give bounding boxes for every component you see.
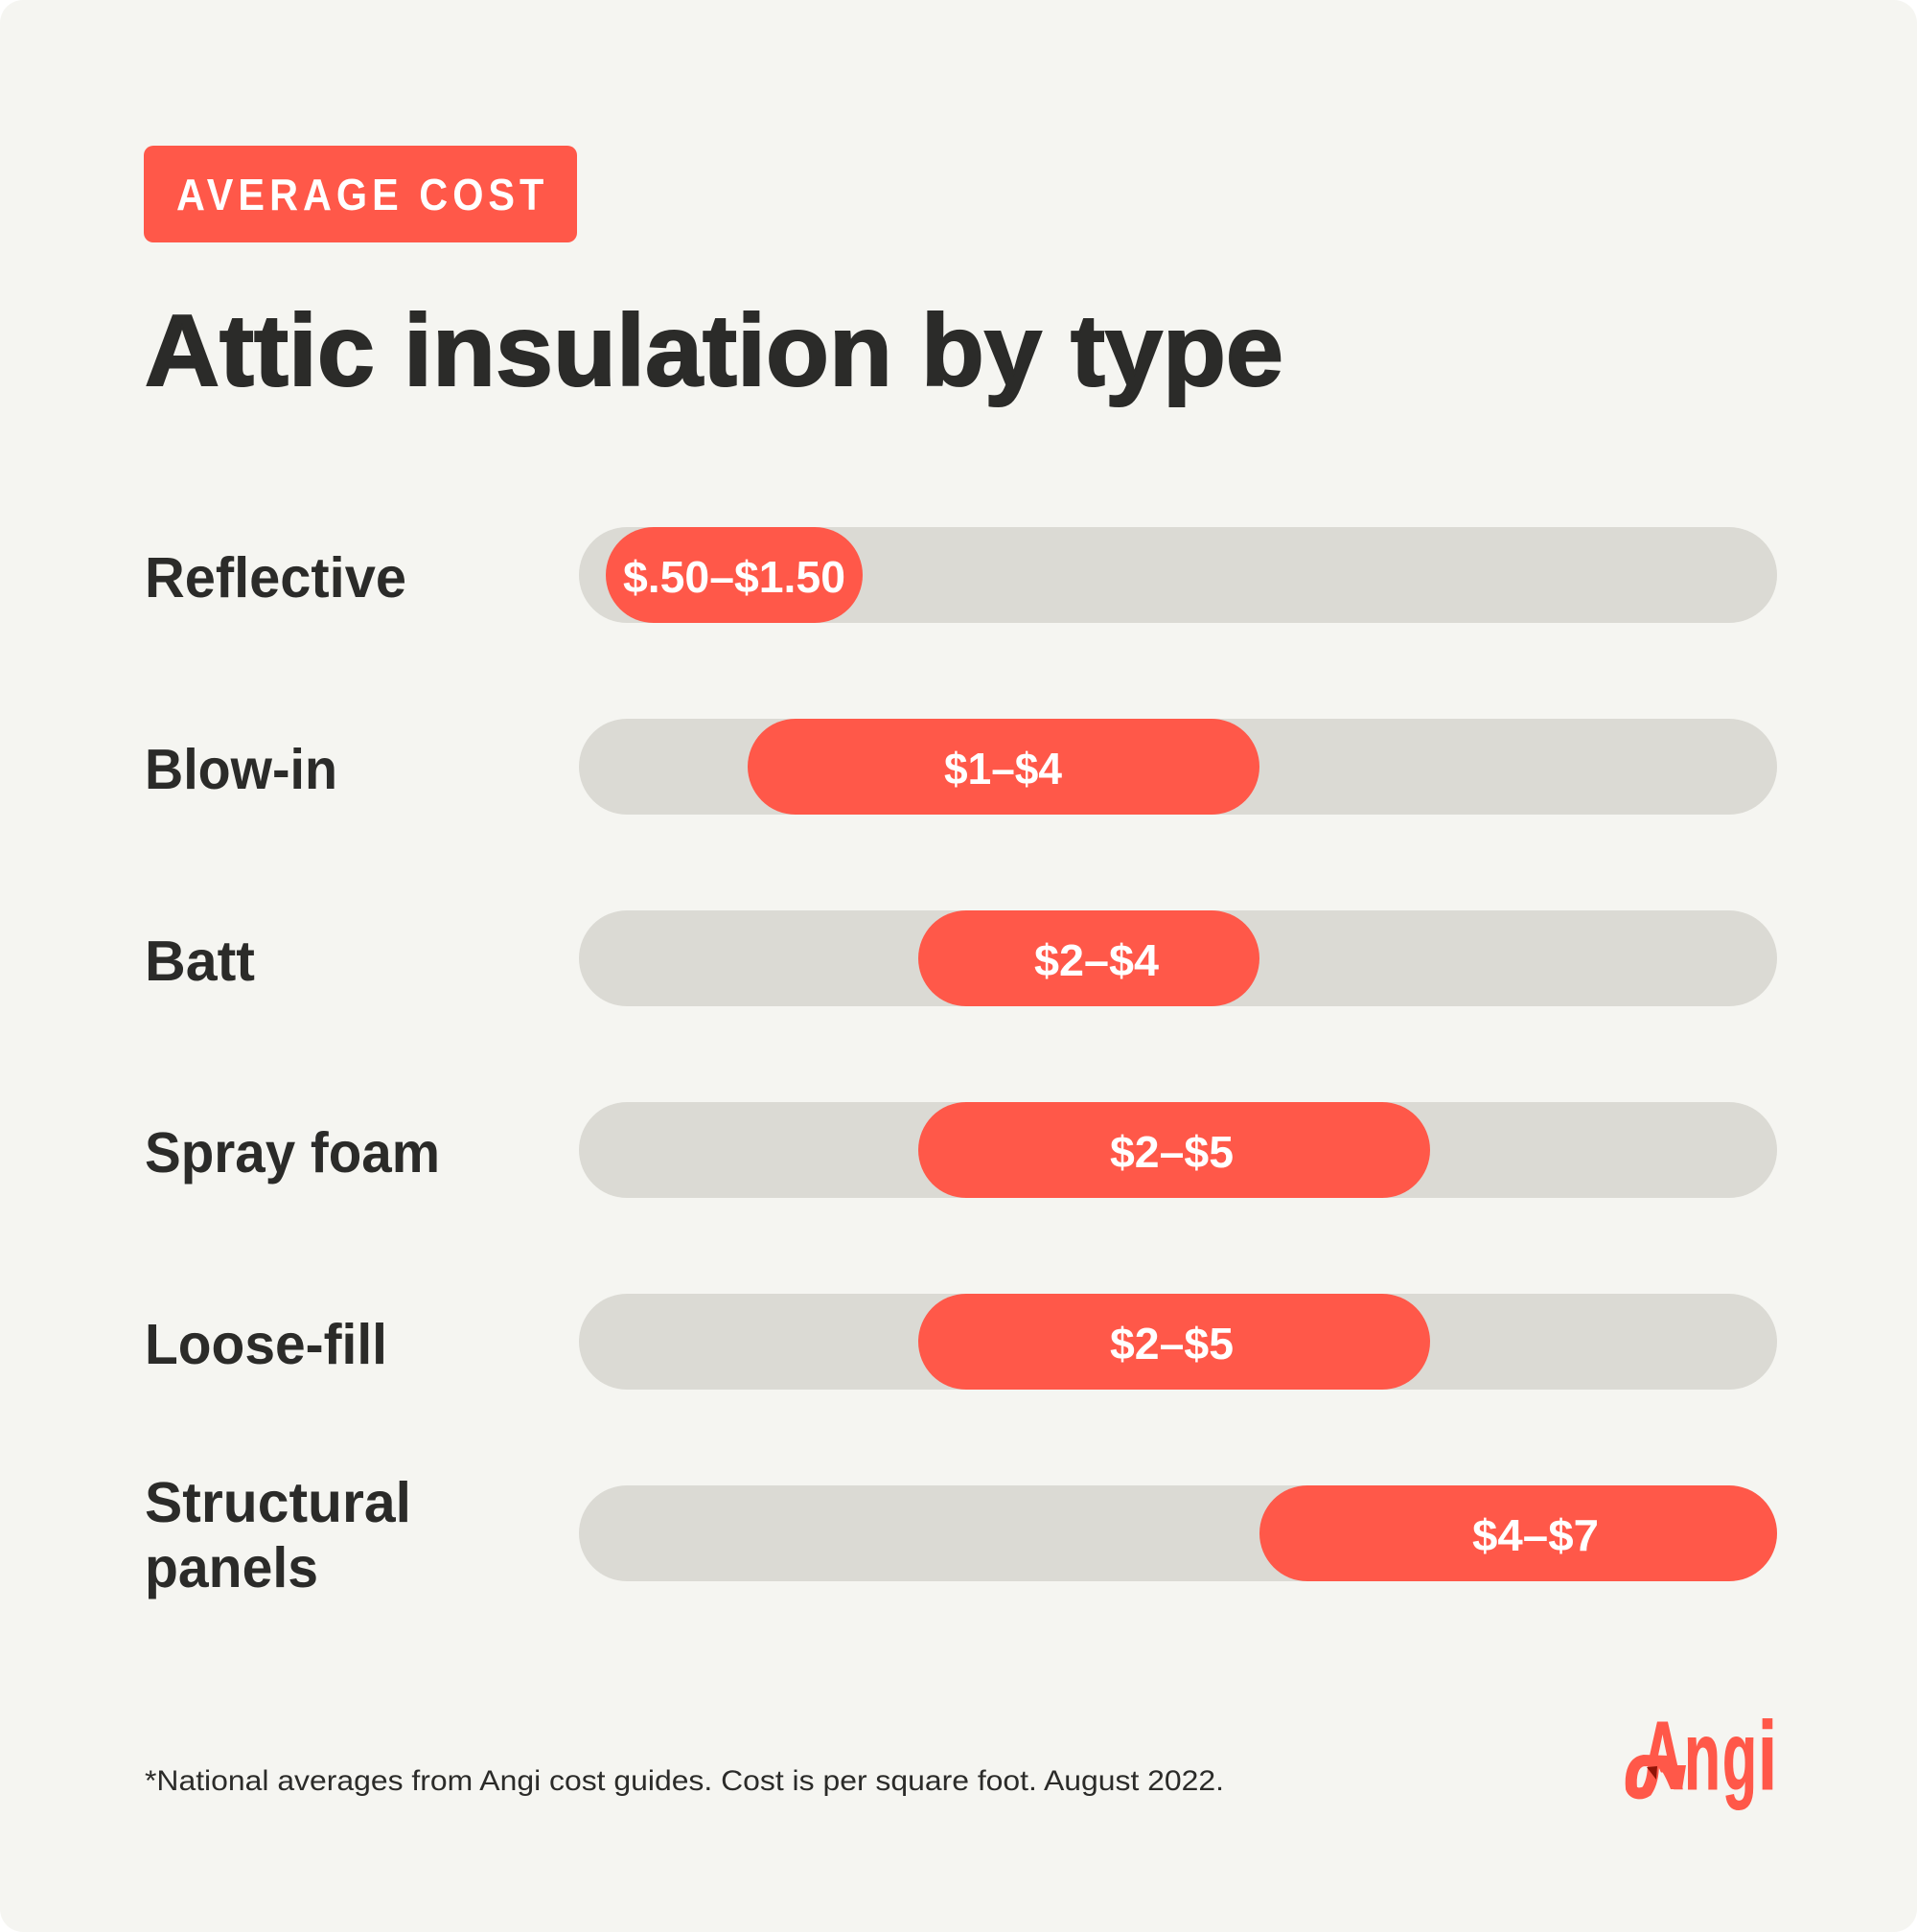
row: Structural panels bbox=[145, 1471, 1777, 1599]
range bar: Blow-in bbox=[748, 719, 1259, 815]
track: Blow-in bbox=[579, 719, 1777, 815]
title: Attic insulation by type bbox=[145, 294, 1283, 407]
logo: Angi: g bbox=[1722, 1703, 1757, 1810]
label: Reflective: Reflective bbox=[145, 546, 406, 610]
range bar: Structural panels bbox=[1259, 1485, 1777, 1581]
row: Blow-in bbox=[145, 719, 1777, 815]
label: Loose-fill: Loose-fill bbox=[145, 1313, 387, 1376]
row: Loose-fill bbox=[145, 1294, 1777, 1390]
logo: Angi bbox=[1626, 1718, 1773, 1810]
row: Reflective bbox=[145, 527, 1777, 623]
track: Loose-fill bbox=[579, 1294, 1777, 1390]
footnote: *National averages from Angi cost guides. Cost is per square foot. August 2022. bbox=[145, 1765, 1224, 1797]
value: Batt: $2–$4 bbox=[1034, 935, 1159, 985]
track: Batt bbox=[579, 910, 1777, 1006]
label: Blow-in: Blow-in bbox=[145, 738, 337, 801]
label: Batt: Batt bbox=[145, 930, 255, 993]
label: Spray foam: Spray foam bbox=[145, 1121, 440, 1184]
value: Reflective: $.50–$1.50 bbox=[623, 552, 845, 602]
label: Structural panels bbox=[145, 1471, 411, 1599]
label: Structural panels: panels bbox=[145, 1536, 318, 1599]
badge: average cost: AVERAGE COST bbox=[176, 171, 544, 220]
range bar: Batt bbox=[918, 910, 1259, 1006]
logo: Angi: n bbox=[1684, 1703, 1721, 1810]
track: Structural panels bbox=[579, 1485, 1777, 1581]
logo: Angi: A bbox=[1641, 1703, 1684, 1810]
range bar: Loose-fill bbox=[918, 1294, 1430, 1390]
logo: Angi: i bbox=[1758, 1703, 1777, 1810]
value: Loose-fill: $2–$5 bbox=[1110, 1319, 1234, 1368]
badge: average cost bbox=[144, 146, 577, 242]
track: Spray foam bbox=[579, 1102, 1777, 1198]
track: Reflective bbox=[579, 527, 1777, 623]
value: Blow-in: $1–$4 bbox=[944, 744, 1062, 794]
value: Structural panels: $4–$7 bbox=[1472, 1510, 1599, 1560]
row: Spray foam bbox=[145, 1102, 1777, 1198]
row: Batt bbox=[145, 910, 1777, 1006]
value: Spray foam: $2–$5 bbox=[1110, 1127, 1234, 1177]
range bar: Spray foam bbox=[918, 1102, 1430, 1198]
range bar: Reflective bbox=[606, 527, 863, 623]
label: Structural panels: Structural bbox=[145, 1471, 411, 1534]
